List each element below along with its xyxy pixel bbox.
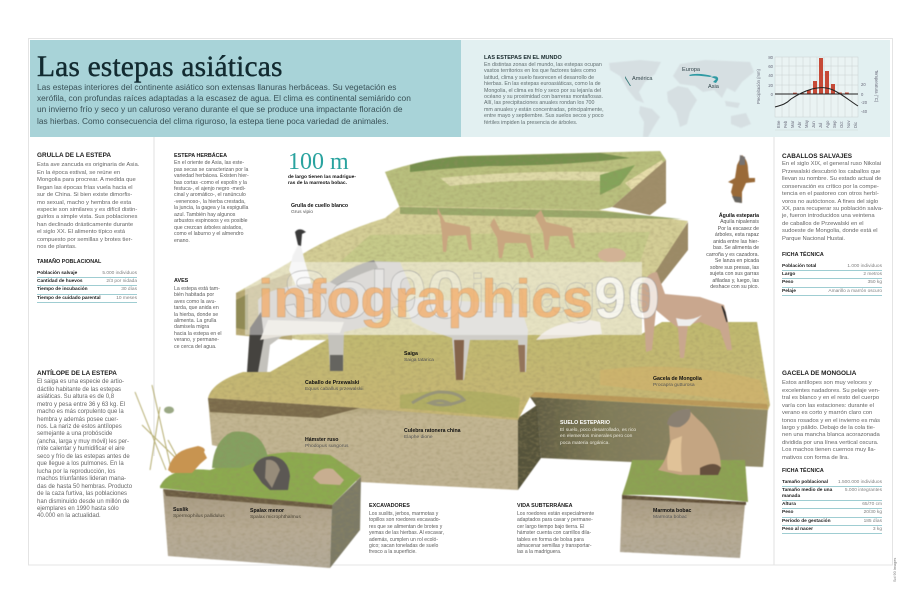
label: suelo estepario (560, 420, 636, 446)
body text: Estos antílopes son muy veloces y (782, 380, 872, 386)
body text: Los suslits, jerbos, marmotas y (369, 511, 438, 517)
body text: lucha por la reproducción, los (37, 469, 115, 475)
body text: pas secas se caracterizan por la (174, 167, 248, 173)
panel: águila esteparia: sujeta con sus garras (710, 271, 759, 277)
body text: verano, y permane- (174, 337, 219, 343)
label: suelo estepario: en elementos minerales pero con (560, 434, 632, 439)
text: las estepas en el mundo: latitud, clima y suelo favorecen el desarrollo de (484, 75, 594, 81)
body text: han disminuido desde un millón de (37, 499, 129, 505)
body text (369, 511, 444, 555)
body text: guirlos a simple vista. Sus poblaciones (37, 214, 137, 220)
label: caballo de przewalski: Caballo de Przewalski (305, 380, 359, 386)
header panel: world context (461, 40, 890, 137)
panel: águila esteparia: Águila esteparia (719, 213, 759, 219)
body text: Przewalski descubrió los caballos que (782, 169, 880, 175)
label: marmota bobac: Marmota bobac (653, 508, 691, 514)
data table (782, 264, 882, 296)
body text: Esta ave zancuda es originaria de Asia. (37, 162, 139, 168)
body text: tencia en el pastoreo con otros herbí- (782, 191, 879, 197)
body text: Los roedores están especialmente (517, 511, 594, 517)
body text: varía con las estaciones: durante el (782, 403, 874, 409)
climate chart: 40 (768, 73, 774, 78)
panel: aves (174, 278, 222, 350)
body text: ejemplares en 1990 hasta sólo (37, 506, 119, 512)
data table: 10 meses (116, 296, 137, 301)
label: grulla de cuello blanco: Grus vipio (291, 210, 313, 215)
climate chart: Oct (839, 121, 844, 128)
body text: han declinado drásticamente durante (37, 222, 133, 228)
body text: alimenta. La grulla (174, 318, 216, 324)
body text: bién habitada por (174, 292, 214, 298)
number: 100 m (288, 149, 349, 175)
body text: adaptados para cavar y permane- (517, 517, 593, 523)
climate chart: Feb (783, 120, 788, 128)
body text: tral es blanco y en el resto del cuerpo (782, 395, 879, 401)
body text (782, 161, 883, 242)
body text: En la época estival, se reúne en (37, 170, 120, 176)
header panel: title and intro (30, 40, 461, 137)
heading: EXCAVADORES (369, 503, 410, 509)
body text: machos triunfantes lideran mana- (37, 476, 126, 482)
lying saiga (536, 320, 602, 340)
data table: Tamaño medio de una (782, 488, 832, 493)
body text: sur de China. Si bien existe dimorfis- (37, 192, 132, 198)
climate chart: 80 (768, 55, 774, 60)
climate chart: 60 (768, 64, 774, 69)
panel: águila esteparia: afiladas y, luego, las (712, 278, 759, 284)
body text (174, 286, 222, 350)
panel: águila esteparia: deshace con su pico. (710, 284, 759, 290)
body text: El saiga es una especie de artio- (37, 379, 124, 385)
body text: -venenoso-, la hierba crestada, (174, 199, 246, 205)
data table: Tiempo de cuidado parental (37, 296, 101, 301)
text: las estepas en el mundo: mm anuales y están concentradas, principalmente, (484, 107, 604, 113)
body text: yemas de las hierbas. Al excavar, (369, 530, 444, 536)
climate chart: Ene (776, 120, 781, 128)
label: culebra ratonera china: Culebra ratonera china (404, 428, 461, 434)
text: las estepas en el mundo: vastos territorios en los que factores tales como (484, 68, 596, 74)
data table: 30 días (121, 287, 137, 292)
eagle (728, 155, 755, 203)
heading: CABALLOS SALVAJES (782, 153, 852, 160)
body text: festuca-, el ajenjo negro -medi- (174, 186, 246, 192)
saiga (405, 298, 528, 380)
body text: La estepa está tam- (174, 286, 220, 292)
world map: América (632, 76, 653, 82)
body text: llegan las épocas frías vuela hacia el (37, 185, 133, 191)
credit: Sol 90 Images (893, 558, 897, 582)
body text: das de hasta 50 hembras. Producto (37, 484, 132, 490)
tier 2: grass plain (236, 206, 688, 340)
world map: Asia (708, 84, 720, 90)
climate chart: Mar (790, 120, 795, 128)
body text: nos. La nariz de estos antílopes (37, 424, 122, 430)
tier 1: green hills (385, 151, 666, 215)
label: suslik (173, 507, 225, 519)
body text: damisela migra (174, 324, 209, 330)
label: caballo de przewalski: Equus caballus przewalskii (305, 387, 363, 392)
callout: 100 m (288, 149, 356, 186)
body text: tonos rosados y en el invierno es más (782, 418, 880, 424)
tier 3 dark side and right soil (518, 397, 768, 490)
climate chart: 20 (861, 82, 866, 87)
bars (793, 58, 849, 94)
body text: tables en forma de bolsa para (517, 537, 584, 543)
body text: cer largo tiempo bajo tierra. El (517, 524, 584, 530)
caption (288, 174, 356, 186)
world map (609, 60, 754, 137)
heading: ESTEPA HERBÁCEA (174, 153, 227, 159)
body text: que crezcan árboles aislados, (174, 225, 243, 231)
tier 3 left soil (208, 398, 518, 490)
label: hámster ruso: Phodopus sungorus (305, 444, 349, 449)
data table: 1.000 individuos (847, 264, 882, 269)
label: grulla de cuello blanco: Grulla de cuello blanco (291, 203, 348, 209)
body text: variedad herbácea. Existen hier- (174, 173, 249, 179)
body text: hembra y además posee cuer- (37, 417, 118, 423)
label: suelo estepario: poca materia orgánica. (560, 440, 610, 446)
body text: el siglo XX. El alimento típico está (37, 229, 125, 235)
intro text: un invierno frío y seco y un caluroso verano durante el que se produce una impactante floración de (37, 104, 402, 114)
body text (37, 162, 139, 250)
tier 3 grass top (208, 322, 770, 420)
climate chart: -40 (861, 109, 868, 114)
body text: En el siglo XIX, el general ruso Nikolai (782, 161, 881, 167)
body text: macho es más corpulento que la (37, 409, 124, 415)
body text: seco y frío de las estepas antes de (37, 454, 130, 460)
mongolian gazelle (640, 272, 732, 358)
body text: especie son similares y es difícil distin- (37, 207, 137, 213)
icon: tall grass (135, 385, 188, 473)
panel: gacela de mongolia (782, 370, 882, 534)
panel: águila esteparia: anida entre las hier- (713, 239, 759, 245)
data table: 2/3 por nidada (106, 279, 137, 284)
watermark: Sol90 (283, 257, 464, 333)
climate chart: Nov (846, 120, 851, 128)
panel: estepa herbácea (174, 152, 249, 244)
body text: dáctilo habitante de las estepas (37, 387, 121, 393)
panel: águila esteparia: Aquila nipalensis (720, 219, 759, 225)
data table: Población total (782, 264, 816, 269)
label: suelo estepario: SUELO ESTEPARIO (560, 420, 610, 426)
text: las estepas en el mundo: océano y su proximidad con barreras montañosas. (484, 94, 603, 100)
label: hámster ruso: Hámster ruso (305, 437, 338, 443)
body text: arbustos espinosos y es posible (174, 218, 248, 224)
body text: hacia la estepa en el (174, 331, 222, 337)
body text: largo y pálido. Debajo de la cola tie- (782, 425, 875, 431)
marmot (658, 409, 721, 475)
watermark (258, 257, 660, 333)
text: las estepas en el mundo: Allí, las precipitaciones anuales rondan los 700 (484, 100, 594, 106)
text: las estepas en el mundo (484, 62, 604, 126)
temperature curve (775, 88, 858, 107)
body text (174, 160, 249, 244)
panel: excavadores (369, 503, 444, 555)
body text: metro y pesa entre 36 y 63 kg. El (37, 402, 125, 408)
label: saiga: Saiga (404, 351, 418, 357)
data table: 20/30 kg (864, 510, 882, 515)
climate chart: 20 (768, 83, 774, 88)
body text: almacenar semillas y transportar- (517, 543, 592, 549)
data table: 65/70 cm (862, 502, 882, 507)
label: suslik: Spermophilus pallidulus (173, 514, 225, 519)
body text: dividida por una línea vertical oscura. (782, 440, 878, 446)
body text: semejante a una probóscide (37, 431, 112, 437)
caption: de largo tienen las madrigue- (288, 175, 356, 180)
body text: (ancha, larga y muy móvil) les per- (37, 439, 129, 445)
text: las estepas en el mundo: fértiles impiden la presencia de árboles. (484, 120, 577, 126)
climate chart: -20 (861, 100, 868, 105)
panel: águila esteparia (706, 212, 760, 290)
body text: fresco a la superficie. (369, 549, 417, 555)
body text: res que se alimentan de brotes y (369, 524, 442, 530)
body text: mo sexual, macho y hembra de esta (37, 200, 131, 206)
watermark: 90 (594, 266, 660, 331)
data table: Pelaje (782, 289, 796, 294)
label: suelo estepario: El suelo, poco desarrollado, es rico (560, 428, 636, 432)
body text: hámster cuenta con carrillos dila- (517, 530, 591, 536)
watermark band (245, 262, 642, 335)
data table: Período de gestación (782, 519, 831, 524)
climate chart: Abr (797, 121, 802, 128)
heading: AVES (174, 278, 188, 284)
label: marmota bobac: Marmota bobac (653, 515, 687, 520)
body text: En el oriente de Asia, las este- (174, 160, 244, 166)
data table: Tamaño poblacional (782, 480, 828, 485)
data table: 3 kg (873, 527, 882, 532)
subheading: FICHA TÉCNICA (782, 252, 824, 258)
label: gacela de mongolia: Gacela de Mongolia (653, 376, 702, 382)
body text: Los machos tienen cuernos muy lla- (782, 447, 876, 453)
body text: que llegue a los pulmones. En la (37, 461, 124, 467)
data table: Peso (782, 280, 793, 285)
climate chart: Jun (811, 121, 816, 128)
label: grulla de cuello blanco (291, 203, 348, 215)
data table (37, 270, 137, 303)
data table (782, 480, 882, 534)
body text: 40.000 en la actualidad. (37, 513, 101, 519)
panel: águila esteparia: sobre sus presas, las (710, 265, 759, 271)
data table: Población salvaje (37, 271, 77, 276)
caption: ras de la marmota bobac. (288, 181, 347, 186)
body text: je, fueron introducidos una veintena (782, 213, 875, 219)
body text: nos de plantas. (37, 244, 77, 250)
label: saiga (404, 351, 434, 363)
climate chart (756, 55, 879, 130)
title: Las estepas asiáticas (37, 51, 283, 83)
text: las estepas en el mundo: Mongolia, el clima es frío y seco por su lejanía del (484, 88, 601, 94)
body text: ce cerca del agua. (174, 344, 216, 350)
data table: Largo (782, 272, 795, 277)
climate chart: 0 (861, 92, 864, 97)
label: spalax menor: Spalax menor (250, 508, 284, 514)
heading: GRULLA DE LA ESTEPA (37, 152, 111, 159)
body text: excelentes nadadores. Su pelaje ven- (782, 388, 880, 394)
body text: de caballos de Przewalski en el (782, 221, 864, 227)
panel: águila esteparia: árboles, esta rapaz (715, 232, 759, 238)
data table: Peso al nacer (782, 527, 813, 532)
climate chart: 0 (771, 92, 774, 97)
text: las estepas en el mundo: En distintas zonas del mundo, las estepas ocupan (484, 62, 602, 68)
label: caballo de przewalski (305, 380, 364, 392)
suslik (168, 446, 207, 473)
data table: Peso (782, 510, 793, 515)
label: marmota bobac (653, 508, 692, 520)
panel: vida subterránea (517, 502, 594, 555)
body text: Mongolia para procrear. A medida que (37, 177, 136, 183)
climate chart: Ago (825, 120, 830, 128)
climate chart: Jul (818, 123, 823, 128)
body text: asiáticas. Su altura es de 0,8 (37, 394, 114, 400)
label: gacela de mongolia: Procapra gutturosa (653, 383, 695, 388)
body text: azul. También hay algunos (174, 212, 235, 218)
horse (247, 260, 412, 372)
watermark: infographics (258, 269, 593, 329)
data table: 350 kg (868, 280, 882, 285)
body text: mativos con forma de lira. (782, 455, 849, 461)
label: spalax menor: Spalax microphthalmus (250, 515, 301, 520)
label: gacela de mongolia (653, 376, 702, 388)
text: las estepas en el mundo: hierbas. En las estepas euroasiáticas, como la de (484, 81, 601, 87)
panel: águila esteparia: carroña y es cazadora. (706, 252, 759, 258)
heading: las estepas en el mundo: LAS ESTEPAS EN EL MUNDO (484, 55, 562, 61)
body text: llevan su nombre. Su estado actual de (782, 176, 881, 182)
body text: cinal y aromático-, el ranúnculo (174, 192, 246, 198)
body text (37, 378, 132, 519)
data table: Tiempo de incubación (37, 287, 88, 292)
panel: antílope de la estepa (37, 369, 132, 519)
foreground block (160, 432, 361, 568)
body text: verano es corto y marrón claro con (782, 410, 872, 416)
body text: las a la madriguera. (517, 549, 561, 555)
label: saiga: Saiga tatarica (404, 358, 434, 363)
body text (782, 380, 880, 461)
body text (517, 511, 594, 555)
climate chart: Dic (853, 122, 858, 128)
climate chart: Precipitación (mm) (756, 68, 761, 104)
data table: 185 días (864, 519, 882, 524)
label: spalax menor (250, 508, 301, 520)
marmot block (620, 460, 748, 558)
data table: 2 metros (863, 272, 882, 277)
body text: topillos son roedores excavado- (369, 517, 440, 523)
label: culebra ratonera china (404, 428, 461, 440)
world map: Europa (682, 67, 701, 73)
panel: grulla de la estepa (37, 152, 139, 303)
body text: compuesto por semillas y brotes tier- (37, 237, 132, 243)
body text: nen una mancha blanca acorazonada (782, 432, 880, 438)
climate chart: May (804, 119, 809, 128)
intro text: las hierbas. Como consecuencia del clima riguroso, la estepa tiene poca variedad de animales. (37, 116, 389, 126)
body text: gico; sacan toneladas de suelo (369, 543, 438, 549)
intro text (37, 82, 411, 126)
body text: de la caza furtiva, las poblaciones (37, 491, 127, 497)
top tier gazelles (437, 208, 626, 262)
snake (412, 392, 464, 405)
panel: águila esteparia: Se lanza en picada (715, 258, 759, 264)
heading: VIDA SUBTERRÁNEA (517, 503, 573, 509)
subheading: TAMAÑO POBLACIONAL (37, 258, 101, 264)
data table: Cantidad de huevos (37, 279, 83, 284)
body text: enano. (174, 238, 190, 244)
watermark: images (470, 264, 656, 324)
spalax (253, 456, 290, 490)
data table: manada (782, 494, 800, 499)
body text: como el laburno y el almendro (174, 231, 244, 237)
body text: voros no autóctonos. A fines del siglo (782, 199, 878, 205)
data table: 5.000 individuos (102, 271, 137, 276)
panel: águila esteparia: Por la escasez de (718, 226, 759, 232)
data table: Amarillo a marrón oscuro (828, 289, 882, 294)
crane (289, 229, 311, 296)
body text: conservación es crítico por la compe- (782, 184, 879, 190)
body text: sudoeste de Mongolia, donde está el (782, 228, 878, 234)
intro text: xerófila, con profundas raíces adaptadas a la escasez de agua. El clima es continental semiárido con (37, 93, 411, 103)
body text: la juncia, la gagea y la espiguilla (174, 205, 248, 211)
body text: mite calentar y humidificar el aire (37, 446, 125, 452)
heading: ANTÍLOPE DE LA ESTEPA (37, 370, 117, 377)
panel: caballos salvajes (782, 153, 883, 296)
hamster (313, 468, 344, 485)
intro text: Las estepas interiores del continente asiático son extensas llanuras herbáceas. Su vegetación es (37, 82, 396, 92)
subheading: FICHA TÉCNICA (782, 468, 824, 474)
heading: GACELA DE MONGOLIA (782, 370, 856, 377)
body text: aves como la avu- (174, 299, 216, 305)
data table: 1.500.000 individuos (838, 480, 882, 485)
climate chart: Temperatura (°C) (874, 70, 879, 103)
data table: 5.000 integrantes (845, 488, 882, 493)
body text: la hierba, donde se (174, 312, 218, 318)
text: las estepas en el mundo: entre mayo y septiembre. Sus suelos secos y poco (484, 113, 604, 119)
climate chart: Sep (832, 120, 837, 128)
label: culebra ratonera china: Elaphe dione (404, 435, 433, 440)
body text: Parque Nacional Hustai. (782, 236, 845, 242)
body text: bas cortas -como el espolín y la (174, 180, 247, 186)
body text: además, cumplen un rol ecoló- (369, 537, 438, 543)
label: suslik: Suslik (173, 507, 188, 513)
panel: águila esteparia: bas. Se alimenta de (713, 245, 759, 251)
label: hámster ruso (305, 437, 349, 449)
body text: XX, para recuperar su población salva- (782, 206, 883, 212)
data table: Altura (782, 502, 796, 507)
body text: tarda, que anida en (174, 305, 219, 311)
